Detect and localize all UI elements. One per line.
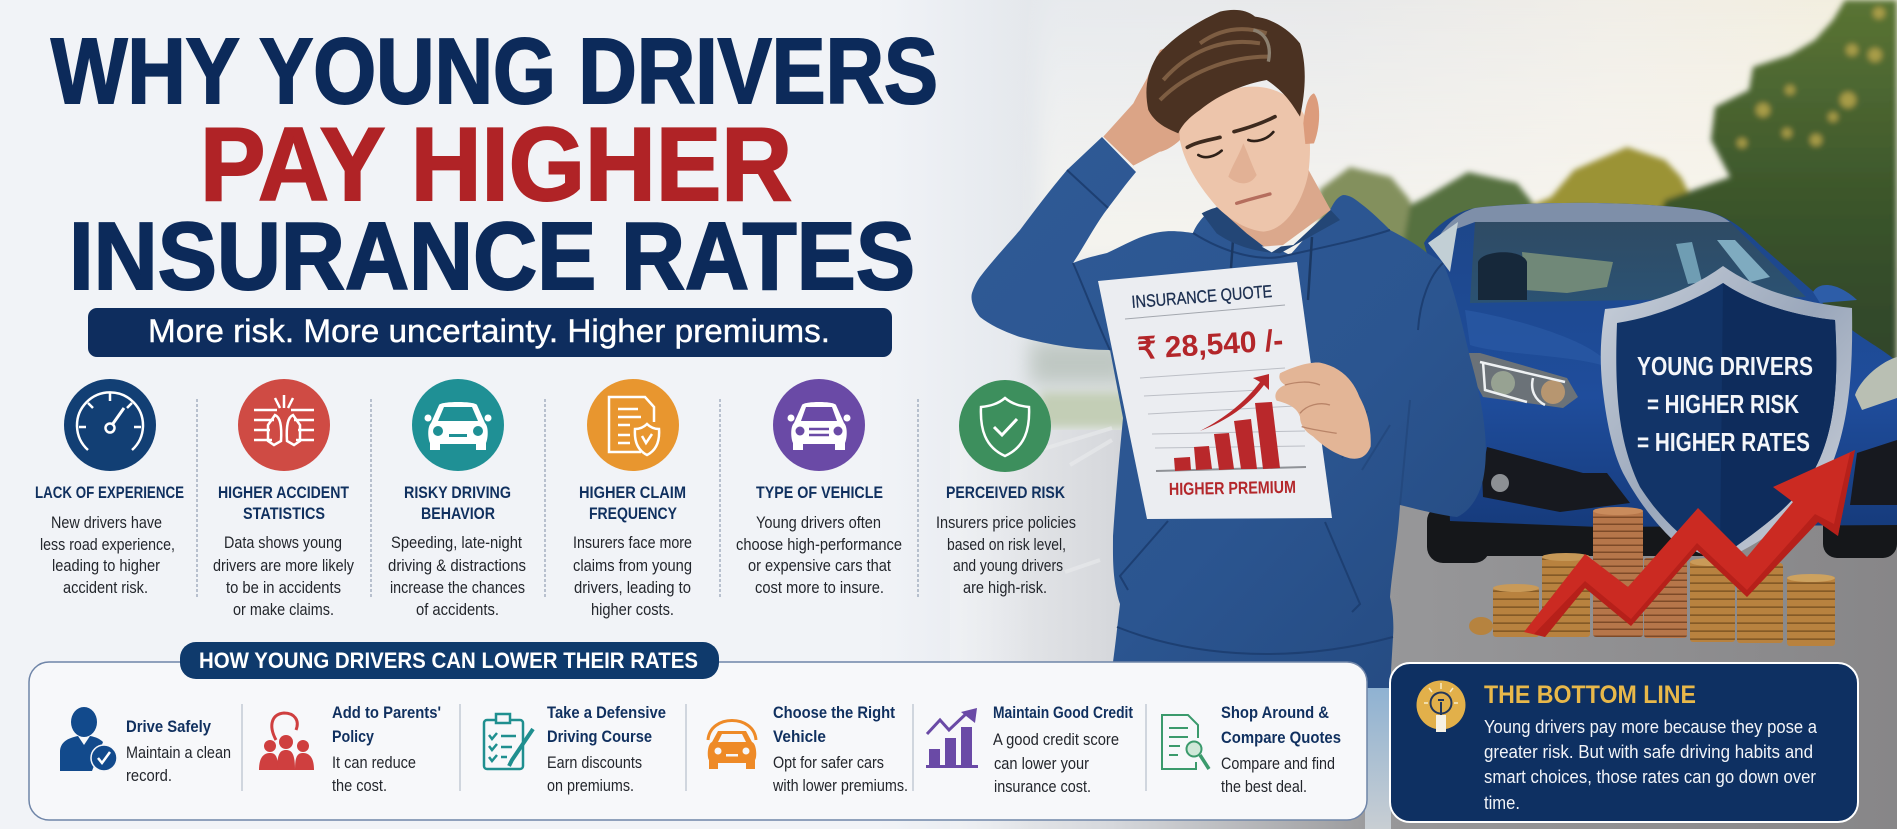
body — [1484, 716, 1818, 813]
risk factor: perceived risk — [936, 380, 1076, 597]
panel heading: HOW YOUNG DRIVERS CAN LOWER THEIR RATES — [199, 648, 698, 673]
windshield — [1470, 222, 1806, 303]
grille — [1482, 440, 1897, 512]
description: Insurers price policies — [936, 513, 1076, 532]
higher premium label: HIGHER PREMIUM — [1169, 477, 1296, 499]
description: Insurers face more — [573, 533, 692, 552]
tip text: A good credit score — [993, 730, 1119, 749]
face — [1178, 87, 1310, 232]
description — [388, 533, 526, 619]
icon: car collision — [238, 379, 330, 471]
body: greater risk. But with safe driving habits and — [1484, 741, 1813, 762]
body: Young drivers pay more because they pose a — [1484, 716, 1818, 737]
icon: light bulb — [1416, 680, 1466, 732]
neck — [1217, 167, 1331, 247]
tip: add to parents' policy — [259, 703, 441, 795]
description: cost more to insure. — [755, 578, 884, 597]
holding hand — [1275, 363, 1371, 459]
description: or make claims. — [233, 600, 334, 619]
hair — [1146, 10, 1305, 133]
hoodie seams and pocket — [1067, 170, 1443, 654]
panel: the bottom line — [1390, 663, 1858, 822]
facial features — [1187, 117, 1275, 203]
heading: PERCEIVED RISK — [946, 483, 1066, 502]
heading — [579, 483, 686, 523]
shield face — [1616, 283, 1836, 558]
head — [1103, 10, 1340, 253]
drawstrings — [1231, 237, 1312, 300]
tip text: Add to Parents' — [332, 703, 441, 722]
description — [40, 513, 175, 597]
heading: FREQUENCY — [589, 504, 678, 523]
description — [736, 513, 902, 597]
description: of accidents. — [416, 600, 499, 619]
heading: TYPE OF VEHICLE — [756, 483, 883, 502]
tip text — [547, 703, 666, 795]
heading: STATISTICS — [243, 504, 325, 523]
heading: RISKY DRIVING — [404, 483, 511, 502]
tip text: can lower your — [994, 754, 1089, 773]
icon: claim document with shield — [587, 379, 679, 471]
tip text: on premiums. — [547, 776, 634, 795]
risk factor: higher accident statistics — [213, 379, 354, 619]
shield text: = HIGHER RATES — [1637, 427, 1810, 457]
hood highlight — [1465, 310, 1610, 368]
tip text: insurance cost. — [994, 777, 1091, 796]
raised hand — [1103, 45, 1180, 166]
icon: vehicle — [773, 379, 865, 471]
tip text: Vehicle — [773, 727, 826, 746]
heading — [218, 483, 350, 523]
icon: person with check — [60, 707, 117, 771]
tip text — [772, 703, 908, 795]
description: driving & distractions — [388, 556, 526, 575]
risk factor: higher claim frequency — [573, 379, 692, 619]
title: WHY YOUNG DRIVERS — [51, 19, 938, 123]
tip: choose the right vehicle — [708, 703, 908, 795]
title: PAY HIGHER — [200, 107, 792, 223]
risk factor: type of vehicle — [736, 379, 902, 597]
description: Data shows young — [224, 533, 342, 552]
icon: car front — [412, 379, 504, 471]
tip text: Shop Around & — [1221, 703, 1329, 722]
heading: HIGHER CLAIM — [579, 483, 686, 502]
icon: checklist clipboard — [484, 714, 533, 769]
tagline banner: More risk. More uncertainty. Higher premiums. — [148, 313, 830, 349]
body: time. — [1484, 792, 1520, 813]
panel frame — [29, 662, 1367, 820]
rising red arrow — [1524, 450, 1855, 637]
title: INSURANCE RATES — [69, 203, 915, 310]
tip: defensive driving course — [484, 703, 666, 795]
description: Young drivers often — [756, 513, 881, 532]
tip text: Opt for safer cars — [773, 753, 884, 772]
risk factor: risky driving behavior — [388, 379, 526, 619]
icon: document with magnifier — [1162, 715, 1209, 769]
hood opening — [1202, 208, 1340, 253]
bar chart — [1174, 402, 1280, 471]
tip text: the cost. — [332, 776, 387, 795]
background trees — [1319, 0, 1897, 420]
tip text: with lower premiums. — [772, 776, 908, 795]
description: leading to higher — [52, 556, 160, 575]
quote amount: ₹ 28,540 /- — [1136, 324, 1284, 366]
heading: LACK OF EXPERIENCE — [35, 483, 184, 502]
shield text — [1637, 351, 1813, 457]
tip text — [993, 703, 1133, 796]
tip text — [126, 717, 231, 785]
tip text: Take a Defensive — [547, 703, 666, 722]
icon: speedometer — [64, 379, 156, 471]
left text background fade — [0, 0, 1030, 829]
coin stacks — [1469, 507, 1835, 646]
tip text: Choose the Right — [773, 703, 895, 722]
car body — [1424, 203, 1897, 527]
car wheels and underside — [1427, 505, 1897, 563]
jeans — [1365, 688, 1391, 829]
body: smart choices, those rates can go down over — [1484, 766, 1816, 787]
description: are high-risk. — [963, 578, 1047, 597]
car roof — [1440, 203, 1730, 235]
description — [213, 533, 354, 619]
heading: HIGHER ACCIDENT — [218, 483, 350, 502]
panel: how young drivers can lower their rates — [29, 642, 1367, 820]
tip text: Maintain Good Credit — [993, 703, 1133, 722]
description: to be in accidents — [226, 578, 341, 597]
tagline banner — [88, 308, 892, 357]
side mirror — [1813, 285, 1857, 303]
tip text: Driving Course — [547, 727, 652, 746]
shield text: = HIGHER RISK — [1647, 389, 1799, 419]
paper sheet — [1098, 262, 1332, 519]
left headlight — [1468, 353, 1578, 408]
description: accident risk. — [63, 578, 148, 597]
tip text: Drive Safely — [126, 717, 211, 736]
heading: THE BOTTOM LINE — [1484, 681, 1696, 709]
t-shirt collar — [1262, 245, 1283, 252]
tip text: Earn discounts — [547, 753, 642, 772]
panel heading — [180, 642, 719, 679]
quote label: INSURANCE QUOTE — [1131, 281, 1273, 312]
description: New drivers have — [51, 513, 162, 532]
shield callout — [1601, 266, 1852, 562]
chart arrow — [1200, 374, 1269, 431]
description: higher costs. — [591, 600, 674, 619]
heading — [404, 483, 511, 523]
description — [573, 533, 692, 619]
tip text: record. — [126, 766, 172, 785]
description: claims from young — [573, 556, 692, 575]
description: less road experience, — [40, 535, 175, 554]
tip text — [332, 703, 441, 795]
description: or expensive cars that — [748, 556, 891, 575]
car — [1424, 203, 1897, 563]
shield text: YOUNG DRIVERS — [1637, 351, 1813, 381]
icon: growth chart — [926, 708, 978, 768]
description: drivers are more likely — [213, 556, 354, 575]
icon: family — [259, 713, 314, 770]
tip: drive safely — [60, 707, 231, 785]
tip text: Maintain a clean — [126, 743, 231, 762]
column dividers — [197, 399, 918, 597]
description: Speeding, late-night — [391, 533, 522, 552]
shield frame — [1601, 266, 1852, 562]
tip text — [1221, 703, 1341, 796]
insurance quote paper — [1098, 262, 1332, 519]
icon: shield check — [959, 380, 1051, 472]
ear — [1303, 93, 1319, 144]
tip: shop around and compare quotes — [1162, 703, 1341, 796]
road and verge — [950, 340, 1897, 829]
hoodie — [971, 137, 1486, 690]
tip text: It can reduce — [332, 753, 416, 772]
heading: BEHAVIOR — [421, 504, 495, 523]
right headlight — [1855, 357, 1897, 410]
icon: orange car — [708, 720, 756, 769]
tip: maintain good credit — [926, 703, 1133, 796]
tip text: Compare Quotes — [1221, 728, 1341, 747]
side windows — [1428, 222, 1458, 272]
title — [51, 19, 938, 310]
description: increase the chances — [390, 578, 525, 597]
description: choose high-performance — [736, 535, 902, 554]
tip text: Compare and find — [1221, 754, 1335, 773]
description: drivers, leading to — [574, 578, 691, 597]
tip text: the best deal. — [1221, 777, 1307, 796]
description: based on risk level, — [947, 535, 1066, 554]
risk factor: lack of experience — [35, 379, 184, 597]
paper lines — [1140, 368, 1306, 471]
tip text: Policy — [332, 727, 374, 746]
description — [936, 513, 1076, 597]
teen driver — [971, 10, 1486, 690]
description: and young drivers — [953, 556, 1063, 575]
